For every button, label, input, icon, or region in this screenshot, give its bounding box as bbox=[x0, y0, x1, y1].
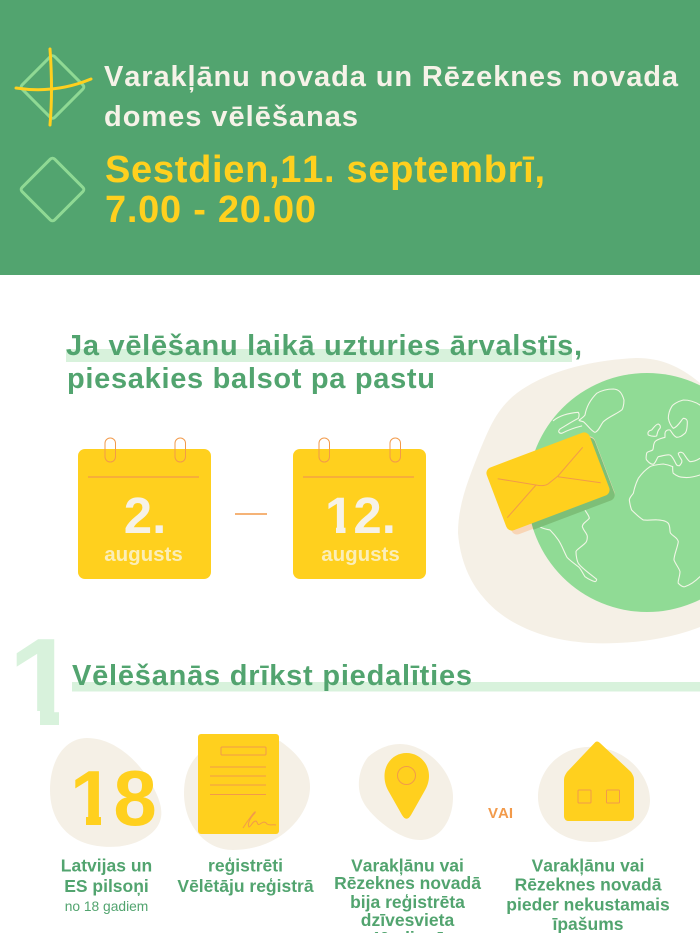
requirement: owns real estate: Rēzeknes novadā bbox=[515, 874, 662, 894]
section heading: Vēlēšanās drīkst piedalīties bbox=[72, 660, 472, 692]
requirement: citizens aged 18: 18 bbox=[70, 754, 157, 842]
title: Varakļānu novada un Rēzeknes novada bbox=[104, 61, 679, 93]
icon: envelope bbox=[485, 431, 616, 537]
requirement: registered residence bbox=[334, 744, 481, 933]
election date and time: Sestdien,11. septembrī, bbox=[105, 149, 545, 191]
section number 1: 1 bbox=[8, 614, 77, 752]
calendar: 2. augusts bbox=[78, 438, 211, 579]
icon: ballot checkbox with cross bbox=[16, 49, 91, 125]
calendar: 12. augusts bbox=[293, 438, 426, 579]
postal voting heading: Ja vēlēšanu laikā uzturies ārvalstīs, bbox=[66, 330, 582, 362]
requirement: registered residence: Varakļānu vai bbox=[351, 856, 464, 876]
header band bbox=[0, 0, 700, 275]
continents bbox=[539, 389, 700, 587]
postal voting heading bbox=[66, 330, 582, 395]
requirement: voter register: reģistrēti bbox=[208, 856, 283, 876]
or label: VAI bbox=[488, 805, 513, 822]
globe bbox=[528, 373, 700, 612]
election date and time bbox=[105, 149, 545, 231]
title bbox=[104, 61, 679, 133]
icon: empty checkbox bbox=[20, 157, 85, 222]
requirement: owns real estate: pieder nekustamais bbox=[506, 894, 670, 914]
requirement: citizens aged 18: Latvijas un bbox=[61, 856, 152, 876]
requirement: citizens aged 18: no 18 gadiem bbox=[65, 899, 148, 914]
title: domes vēlēšanas bbox=[104, 101, 358, 133]
postal voting heading: piesakies balsot pa pastu bbox=[67, 363, 435, 395]
requirement: citizens aged 18 bbox=[50, 738, 161, 914]
requirement: citizens aged 18: ES pilsoņi bbox=[64, 876, 149, 896]
calendar: 2. augusts: augusts bbox=[104, 543, 183, 566]
requirement: voter register: Vēlētāju reģistrā bbox=[177, 876, 314, 896]
dash between dates bbox=[235, 513, 267, 515]
illustration: globe with envelope bbox=[458, 358, 700, 643]
requirement: registered residence: Rēzeknes novadā bbox=[334, 873, 481, 893]
requirement: owns real estate bbox=[506, 742, 670, 933]
requirement: registered residence: bija reģistrēta bbox=[350, 892, 465, 912]
election date and time: 7.00 - 20.00 bbox=[105, 189, 316, 231]
calendar: 12. augusts: 12. bbox=[325, 487, 396, 544]
requirement: voter register bbox=[177, 734, 314, 896]
calendar: 12. augusts: augusts bbox=[321, 543, 400, 566]
requirement: registered residence: dzīvesvieta bbox=[361, 910, 454, 930]
calendar: 2. augusts: 2. bbox=[124, 487, 166, 544]
section heading bbox=[72, 660, 700, 692]
requirement: owns real estate: Varakļānu vai bbox=[532, 856, 644, 876]
